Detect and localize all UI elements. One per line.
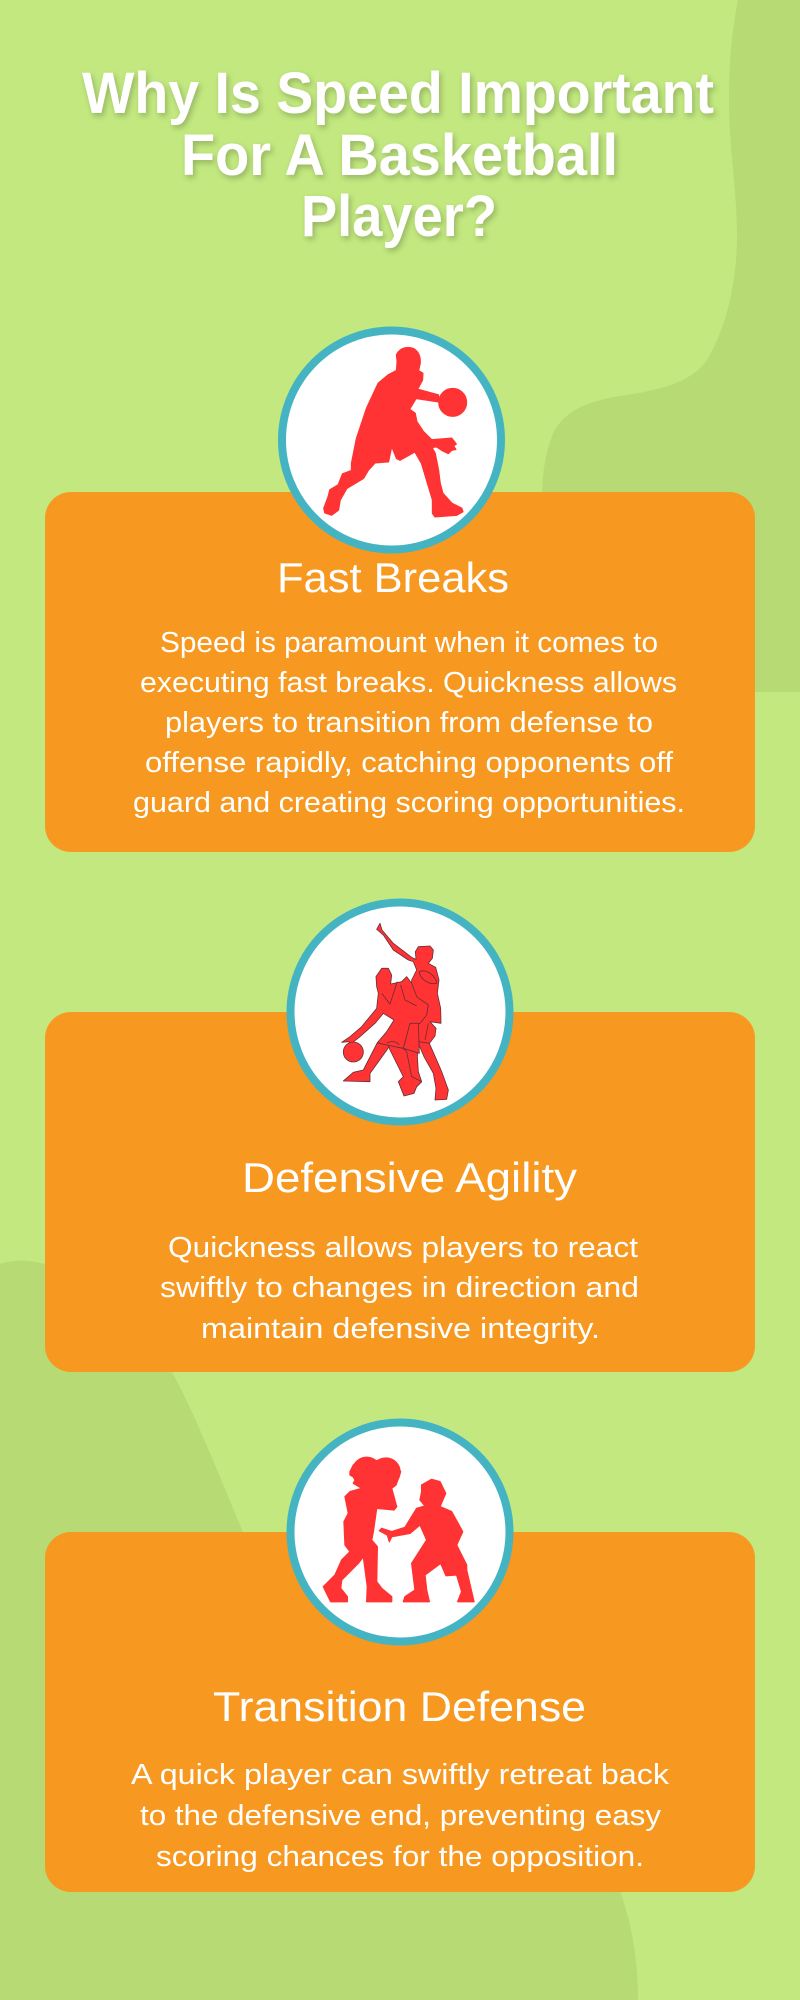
body text: executing fast breaks. Quickness allows [140, 667, 677, 699]
panel: transition defense [45, 1422, 755, 1892]
body text: maintain defensive integrity. [201, 1313, 600, 1345]
body text: guard and creating scoring opportunities. [133, 787, 685, 819]
title [82, 61, 714, 249]
background blob: top right [542, 0, 800, 692]
body text: offense rapidly, catching opponents off [145, 747, 674, 779]
card background [45, 1532, 755, 1892]
title: For A Basketball [181, 123, 618, 188]
heading: Transition Defense [213, 1683, 586, 1730]
card background [45, 1012, 755, 1372]
body text [133, 627, 685, 819]
body text: scoring chances for the opposition. [156, 1841, 644, 1873]
body text: A quick player can swiftly retreat back [131, 1759, 670, 1791]
body text: to the defensive end, preventing easy [140, 1800, 662, 1832]
body text: Quickness allows players to react [168, 1232, 638, 1264]
panel: defensive agility [45, 902, 755, 1372]
panel: fast breaks [45, 330, 755, 852]
title: Why Is Speed Important [82, 61, 714, 126]
icon: two players with ball [290, 1422, 510, 1642]
icon: defender guarding dribbler [290, 902, 510, 1122]
card background [45, 492, 755, 852]
background blob: bottom left [0, 1261, 638, 2000]
body text [131, 1759, 670, 1873]
icon: dribbling player [282, 330, 501, 550]
body text: Speed is paramount when it comes to [160, 627, 658, 659]
heading: Fast Breaks [277, 554, 509, 601]
title: Player? [301, 184, 497, 249]
body text [160, 1232, 639, 1345]
heading: Defensive Agility [242, 1154, 577, 1201]
body text: swiftly to changes in direction and [160, 1272, 639, 1304]
body text: players to transition from defense to [165, 707, 653, 739]
